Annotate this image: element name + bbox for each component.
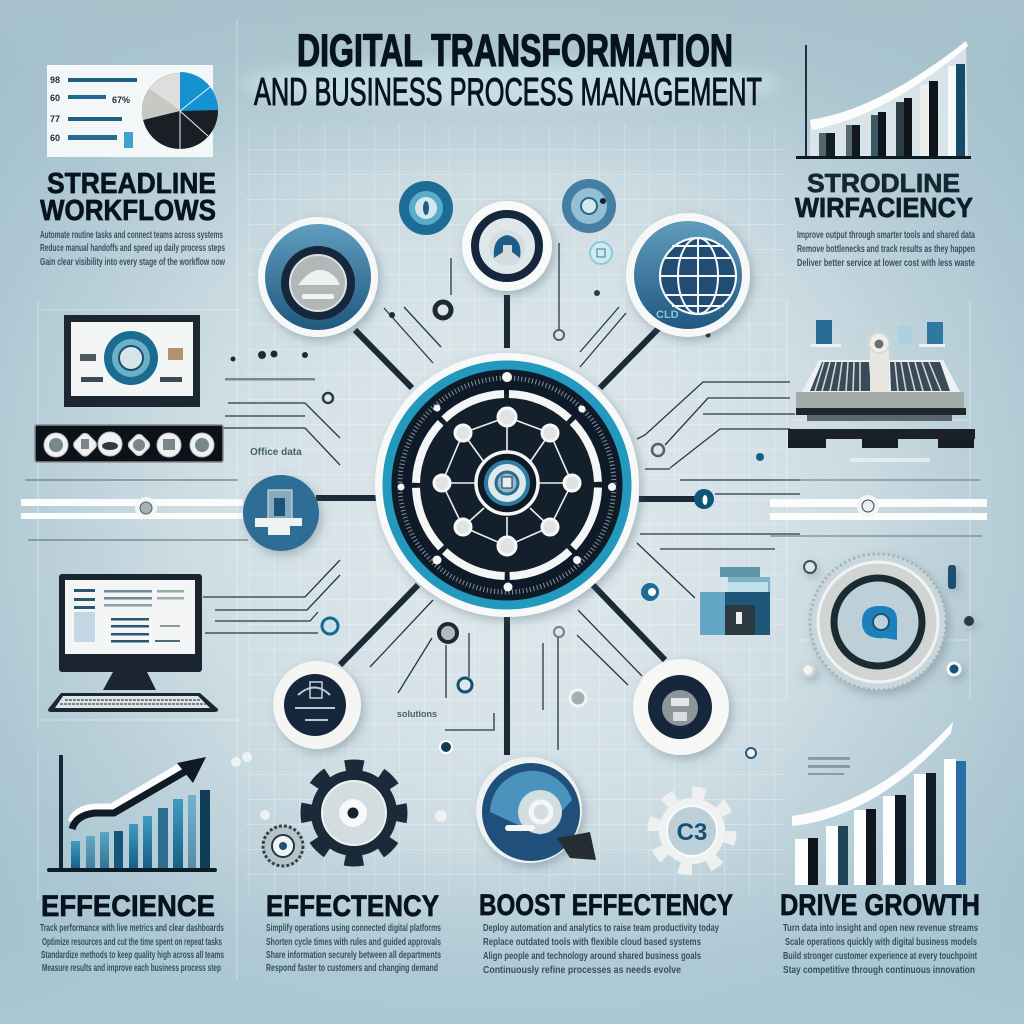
icon: globe disc: CLD [656, 309, 679, 321]
heading [795, 168, 973, 223]
icon strip [35, 425, 223, 462]
icon: right dial gear [802, 554, 974, 690]
icon: blue building [700, 567, 770, 635]
heading and body: boost efficiency: Deploy automation and analytics to raise team productivity today [483, 923, 719, 934]
central hub [375, 353, 639, 617]
heading and body: effecience: Track performance with live metrics and clear dashboards [40, 923, 224, 934]
body text: Automate routine tasks and connect teams across systems [40, 230, 223, 241]
heading and body: boost efficiency: BOOST EFFECTENCY [479, 889, 733, 922]
left divider bands [21, 480, 248, 540]
heading and body: effecience: Measure results and improve each business process step [42, 963, 221, 974]
heading and body: effectency: Shorten cycle times with rules and guided approvals [266, 937, 441, 948]
heading and body: effectency: Simplify operations using connected digital platforms [266, 923, 441, 934]
title: DIGITAL TRANSFORMATION [297, 25, 733, 76]
icon: white gear: C3 [677, 819, 707, 846]
icon: globe disc [626, 213, 750, 337]
icon: top middle ring [462, 201, 552, 291]
body text: Reduce manual handoffs and speed up daily process steps [40, 243, 225, 254]
icon: small blue discs [399, 179, 616, 264]
panel: monitor with dial [64, 315, 200, 407]
outer ring dots [398, 372, 616, 592]
panel: efficiency growth chart [47, 755, 217, 872]
body text [797, 230, 975, 269]
dashboard card with bars and pie chart: 60 [50, 133, 60, 143]
dashboard card with bars and pie chart: 98 [50, 75, 60, 85]
heading and body: drive growth [780, 889, 980, 976]
rising bar chart [796, 41, 971, 159]
heading and body: effecience: Optimize resources and cut the time spent on repeat tasks [42, 937, 222, 948]
dashboard card with bars and pie chart: 67% [112, 95, 130, 105]
body text: Gain clear visibility into every stage of the workflow now [40, 257, 225, 268]
icon: lower right dark lens [633, 659, 729, 755]
small floating dots and nodes: solutions [397, 709, 437, 719]
title [240, 25, 780, 114]
connector lines from hub [316, 295, 695, 755]
heading and body: effecience [40, 890, 224, 974]
heading: STRODLINE [807, 168, 960, 198]
heading and body: drive growth: DRIVE GROWTH [780, 889, 980, 922]
heading and body: effectency [266, 890, 441, 974]
dashboard card with bars and pie chart [47, 65, 218, 157]
heading: WORKFLOWS [40, 195, 216, 227]
panel: machine [788, 320, 975, 462]
icon: dark gear [307, 766, 401, 860]
tick ring [400, 378, 614, 592]
panel: desktop computer [48, 574, 218, 712]
heading: STREADLINE [47, 168, 216, 200]
heading and body: boost efficiency: Continuously refine processes as needs evolve [483, 965, 681, 976]
heading and body: effectency: Respond faster to customers and changing demand [266, 963, 438, 974]
heading and body: boost efficiency [479, 889, 733, 976]
heading and body: effectency: EFFECTENCY [266, 890, 439, 923]
network of nodes [442, 417, 572, 546]
heading [40, 168, 216, 227]
heading and body: boost efficiency: Replace outdated tools with flexible cloud based systems [483, 937, 701, 948]
small floating dots and nodes [225, 290, 764, 753]
heading and body: effecience: EFFECIENCE [41, 890, 215, 923]
icon: lower left dark lens [273, 661, 361, 749]
segmented ring [416, 394, 598, 576]
icon: left blue disc [243, 475, 319, 551]
icon: white gear [654, 793, 730, 869]
icon: small eye gear [231, 752, 447, 866]
right divider bands [770, 480, 987, 536]
heading: WIRFACIENCY [795, 192, 973, 223]
panel: streamline efficiency [795, 41, 975, 269]
icon: left top disc [258, 217, 378, 337]
panel: drive growth chart [746, 722, 966, 885]
dashboard card with bars and pie chart: 60 [50, 93, 60, 103]
heading and body: boost efficiency: Align people and technology around shared business goals [483, 951, 701, 962]
small floating dots and nodes: Office data [250, 447, 302, 458]
heading and body: effectency: Share information securely between all departments [266, 950, 441, 961]
body text [40, 230, 225, 268]
panel: streamline workflows [40, 65, 225, 268]
icon: blue swirl disc [476, 757, 596, 863]
heading and body: drive growth: Stay competitive through continuous innovation [783, 965, 975, 976]
circuit traces [203, 243, 800, 750]
heading and body: effecience: Standardize methods to keep quality high across all teams [41, 950, 224, 961]
title: AND BUSINESS PROCESS MANAGEMENT [254, 71, 762, 114]
dashboard card with bars and pie chart: 77 [50, 114, 60, 124]
